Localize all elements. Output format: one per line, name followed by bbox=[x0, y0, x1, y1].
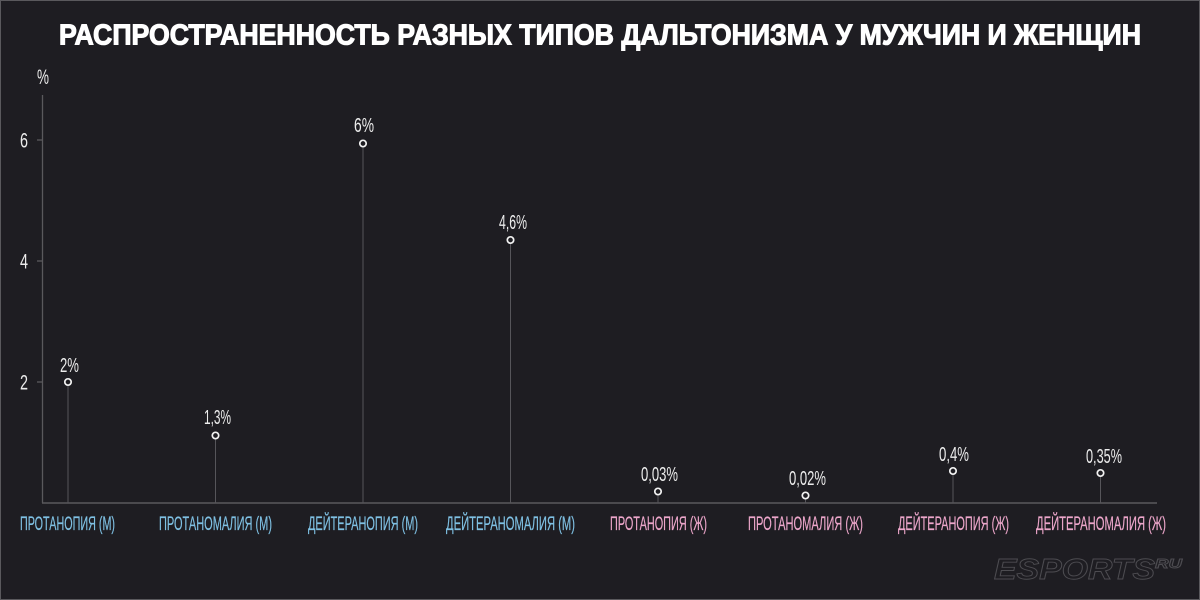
point: протанопия (м) 2% bbox=[60, 355, 79, 503]
label: female deuteranopia: ДЕЙТЕРАНОПИЯ (Ж) bbox=[898, 511, 1009, 535]
y axis label 6: 6 bbox=[20, 130, 28, 152]
y axis bbox=[20, 66, 49, 503]
point: дейтераномалия (м) 4,6%: 4,6% bbox=[499, 212, 527, 234]
lollipop chart bbox=[60, 115, 1122, 503]
point: протаномалия (м) 1,3% bbox=[204, 407, 231, 503]
logo: esports.ru: ESPORTS bbox=[994, 554, 1156, 586]
y axis label 2: 2 bbox=[20, 372, 28, 394]
point: протаномалия (ж) 0,02% bbox=[789, 468, 826, 503]
point: дейтеранопия (ж) 0,4%: 0,4% bbox=[939, 444, 969, 466]
point: протаномалия (ж) 0,02%: 0,02% bbox=[789, 468, 826, 490]
y axis label 4: 4 bbox=[20, 250, 28, 274]
point: протанопия (ж) 0,03% bbox=[641, 464, 678, 503]
label: male protanomaly: ПРОТАНОМАЛИЯ (М) bbox=[159, 513, 272, 535]
point: дейтеранопия (м) 6%: 6% bbox=[354, 115, 374, 137]
point: дейтеранопия (м) 6% bbox=[354, 115, 374, 503]
point: дейтеранопия (ж) 0,4% bbox=[939, 444, 969, 503]
category labels bbox=[20, 511, 1166, 535]
label: male protanopia: ПРОТАНОПИЯ (М) bbox=[20, 513, 115, 535]
label: female protanomaly: ПРОТАНОМАЛИЯ (Ж) bbox=[748, 513, 863, 535]
y axis unit: % bbox=[37, 66, 49, 89]
label: male deuteranopia: ДЕЙТЕРАНОПИЯ (М) bbox=[308, 511, 418, 535]
label: male deuteranomaly: ДЕЙТЕРАНОМАЛИЯ (М) bbox=[446, 511, 575, 535]
point: протанопия (м) 2%: 2% bbox=[60, 355, 79, 377]
title: РАСПРОСТРАНЕННОСТЬ РАЗНЫХ ТИПОВ ДАЛЬТОНИЗМА У МУЖЧИН И ЖЕНЩИН bbox=[59, 20, 1141, 52]
logo: esports.ru: RU bbox=[1155, 556, 1183, 571]
label: female protanopia: ПРОТАНОПИЯ (Ж) bbox=[610, 513, 707, 535]
point: протаномалия (м) 1,3%: 1,3% bbox=[204, 407, 231, 429]
point: дейтераномалия (ж) 0,35% bbox=[1086, 446, 1122, 503]
point: протанопия (ж) 0,03%: 0,03% bbox=[641, 464, 678, 486]
point: дейтераномалия (ж) 0,35%: 0,35% bbox=[1086, 446, 1122, 468]
point: дейтераномалия (м) 4,6% bbox=[499, 212, 527, 503]
x axis bbox=[42, 502, 1157, 504]
